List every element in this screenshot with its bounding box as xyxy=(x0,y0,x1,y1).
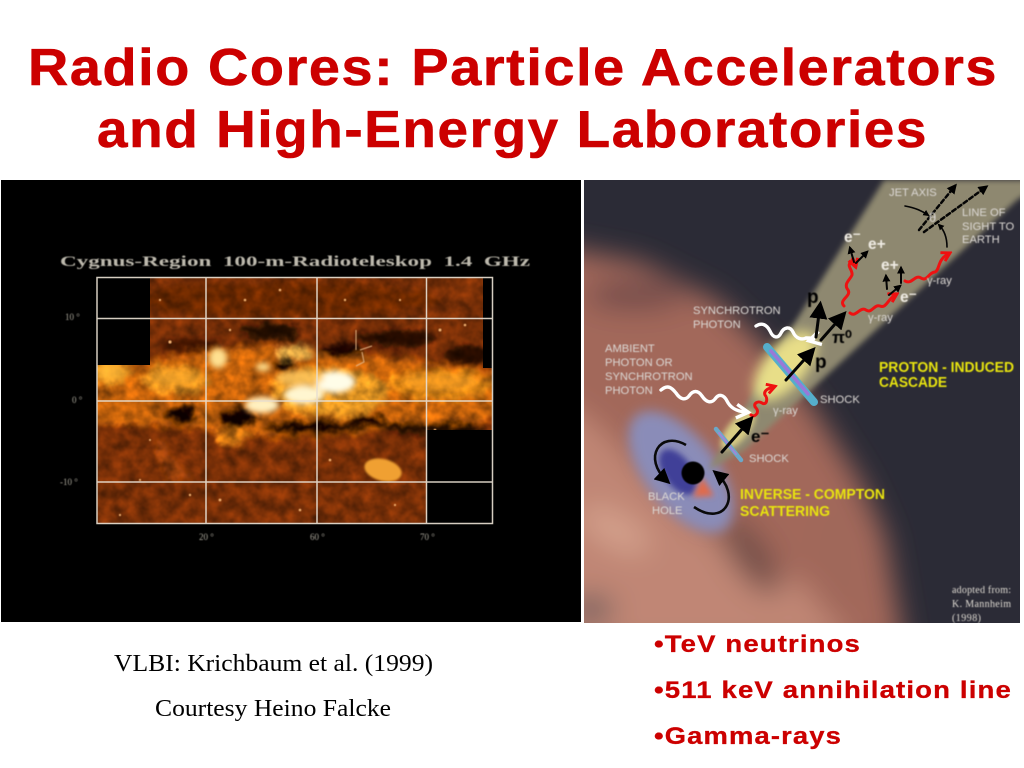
attribution: K. Mannheim xyxy=(952,599,1011,610)
attribution xyxy=(952,585,1011,624)
accretion disc xyxy=(621,404,741,540)
bullet list: •Gamma-rays xyxy=(654,723,842,750)
bullet list xyxy=(654,631,1012,750)
diagram labels: θ xyxy=(929,210,936,225)
diagram labels: e⁻ xyxy=(844,229,861,246)
bright emission core xyxy=(97,348,478,413)
diagram labels: PROTON - INDUCED xyxy=(879,360,1014,376)
diagram labels: SHOCK xyxy=(749,453,789,465)
diagram labels: γ-ray xyxy=(927,275,952,287)
red gamma waves xyxy=(751,254,948,416)
map axis labels: -10 ° xyxy=(60,477,78,487)
diagram labels xyxy=(605,187,1015,624)
black particle arrows xyxy=(722,186,986,452)
diagram labels: BLACK xyxy=(648,491,685,503)
map axis labels: 60 ° xyxy=(310,532,325,542)
diagram labels: SYNCHROTRON xyxy=(605,371,693,383)
diagram labels: γ-ray xyxy=(868,312,893,324)
map axis labels xyxy=(60,312,435,542)
map axis labels: 0 ° xyxy=(72,395,83,405)
diagram labels: INVERSE - COMPTON xyxy=(740,487,885,503)
icon: disc rotation arrows xyxy=(655,441,729,514)
diagram labels: e+ xyxy=(868,236,886,253)
title xyxy=(28,39,998,159)
diagram labels: HOLE xyxy=(652,505,682,517)
panel: jet diagram xyxy=(584,180,1020,623)
radio emission image xyxy=(97,278,492,524)
diagram labels: SHOCK xyxy=(820,394,860,406)
diagram labels: e+ xyxy=(881,257,899,274)
bullet list: •TeV neutrinos xyxy=(654,631,861,658)
caption: VLBI credits xyxy=(114,651,433,722)
diagram labels: π⁰ xyxy=(832,328,852,347)
diagram labels: PHOTON xyxy=(693,319,741,331)
caption: VLBI credits: Courtesy Heino Falcke xyxy=(155,696,391,722)
attribution: adopted from: xyxy=(952,585,1011,596)
jet beam xyxy=(708,180,1024,470)
title: and High-Energy Laboratories xyxy=(97,101,928,159)
diagram labels: SIGHT TO xyxy=(962,221,1015,233)
attribution: (1998) xyxy=(952,613,981,624)
map axis labels: 20 ° xyxy=(199,532,214,542)
diagram labels: e⁻ xyxy=(751,427,769,446)
diagram labels: p xyxy=(807,287,819,308)
shocks xyxy=(716,347,814,460)
diagram labels: γ-ray xyxy=(773,405,798,417)
bullet list: •511 keV annihilation line xyxy=(654,677,1012,704)
diagram labels: SYNCHROTRON xyxy=(693,305,781,317)
white photon waves xyxy=(661,324,814,412)
diagram labels: CASCADE xyxy=(879,375,947,391)
diagram labels: p xyxy=(815,352,827,373)
icon: black hole xyxy=(682,462,704,484)
diagram labels: EARTH xyxy=(962,234,1000,246)
diagram labels: AMBIENT xyxy=(605,343,655,355)
panel: Cygnus region radio map xyxy=(1,180,581,622)
diagram labels: JET AXIS xyxy=(889,187,937,199)
diagram labels: SCATTERING xyxy=(740,504,830,520)
map grid xyxy=(97,277,492,524)
map heading: Cygnus-Region 100-m-Radioteleskop 1.4 GHz xyxy=(60,254,531,270)
caption: VLBI credits: VLBI: Krichbaum et al. (1999) xyxy=(114,651,433,677)
diagram labels: PHOTON xyxy=(605,385,653,397)
map axis labels: 70 ° xyxy=(420,532,435,542)
diagram labels: LINE OF xyxy=(962,207,1006,219)
diagram labels: e⁻ xyxy=(900,289,917,306)
map axis labels: 10 ° xyxy=(65,312,80,322)
diagram labels: PHOTON OR xyxy=(605,357,673,369)
title: Radio Cores: Particle Accelerators xyxy=(28,39,998,97)
